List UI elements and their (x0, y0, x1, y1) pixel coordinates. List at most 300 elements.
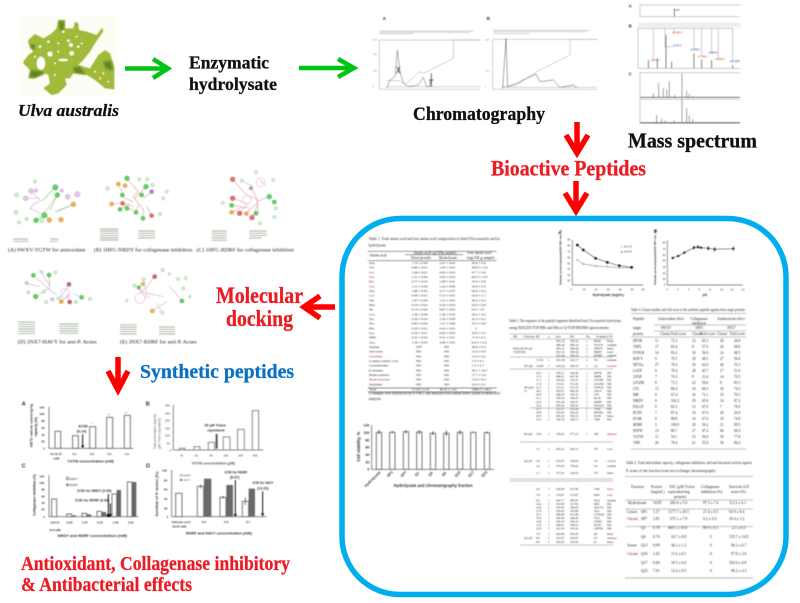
chart B: total antioxidant capacity: 20 (195, 454, 198, 458)
heading: Synthetic peptides: Synthetic peptides (140, 361, 294, 383)
table: peptide fragments: ALL (594, 509, 600, 513)
table: peptide fragments: 335.03 (556, 509, 565, 513)
table: fraction activities: P. acnes of the fraction from ion exchange chromatography (626, 469, 716, 473)
table: peptide fragments: DFTR (594, 371, 602, 375)
table: amino acid composition: ND (416, 350, 422, 354)
table: peptide fragments: RL (594, 532, 598, 536)
chart: soluble protein vs hydrolysate: Hydrolysate (mg/mL) (593, 293, 624, 297)
table: peptide fragments: oxidant (607, 358, 617, 362)
table: docking scores: TGTW (633, 435, 644, 439)
chart C: collagenase inhibition: 0.27 (82, 520, 88, 524)
chart D: P. acnes survival: 60 (164, 488, 168, 492)
table: peptide fragments: 219.05 (556, 459, 565, 463)
table: peptide fragments: 1 (548, 414, 550, 418)
table: fraction activities: acnes (%) (731, 490, 747, 494)
table: amino acid composition: Ile. (369, 308, 374, 312)
table: fraction activities: Collagenase (701, 485, 720, 489)
table: amino acid composition: ND (444, 368, 450, 372)
table: peptide fragments: toxic (607, 493, 614, 497)
table: peptide fragments: 340.26 (556, 516, 565, 520)
table: peptide fragments: 330.18 (556, 418, 565, 422)
table: docking scores: 7 (655, 411, 657, 415)
table: docking scores: 74.3 (671, 375, 677, 379)
table: peptide fragments: 1 (548, 512, 550, 516)
table: amino acid composition: Asp. (369, 261, 376, 265)
icon: Ulva australis seaweed (18, 17, 118, 97)
chart B: total antioxidant capacity: Total antioxidant capacity (153, 414, 157, 449)
table: peptide fragments: 265.99 (570, 532, 579, 536)
table: docking scores: 8 (692, 375, 694, 379)
table: peptide fragments: 245.16 (556, 364, 565, 368)
table: peptide fragments: 1 (586, 371, 588, 375)
table: amino acid composition: His. (369, 326, 375, 330)
table: peptide fragments: 340.26 (570, 516, 579, 520)
table: fraction activities: (mg/mL) (651, 490, 665, 494)
table: docking scores: 14 (692, 417, 696, 421)
chart: mass spectra: b7 768.4 (698, 56, 708, 58)
table: amino acid composition: 3.03 ± 0.04 (439, 275, 455, 279)
table: docking scores: 27 (692, 429, 696, 433)
chart C: collagenase inhibition: 100 (39, 481, 45, 485)
table: docking scores: 26.8 (734, 339, 740, 343)
chart: mass spectra: y10 1093 (730, 61, 740, 63)
table: docking scores: 10 (720, 393, 724, 397)
table: peptide fragments: 8.2 (536, 498, 540, 502)
table: peptide fragments: 17.1 (536, 378, 542, 382)
table: docking scores: 70.5 (734, 375, 740, 379)
table: peptide fragments: 352.24 (570, 526, 579, 530)
table: peptide fragments: toxic (607, 350, 614, 354)
table: amino acid composition: 1) Samples were hydrolyzed by 6 N HCl, and analyzed with sodium buffer system in amino acid (369, 392, 500, 397)
chart: soluble protein vs hydrolysate: 10 (583, 288, 586, 292)
heading: Mass spectrum: Mass spectrum (628, 128, 757, 152)
table: fraction activities: Cation (627, 510, 637, 514)
table: peptide fragments: HAV (594, 493, 601, 497)
table: peptide fragments: 287.87 (570, 498, 579, 502)
table: docking scores: 11 (655, 339, 659, 343)
table: peptide fragments: 285.77 (556, 498, 565, 502)
table: peptide fragments: Table 3. The sequence of the peptide fragments identified from Ulva australis hydrolysate (509, 319, 621, 323)
table: peptide fragments: RT (536, 334, 540, 338)
heading: Enzymatic hydrolysate: Enzymatic (189, 52, 269, 72)
table: docking scores: 48.5 (702, 357, 708, 361)
table: amino acid composition: 13.4 ± 0.2 (472, 354, 486, 358)
table: docking scores: 103.3 (671, 399, 679, 403)
table: amino acid composition: 3.17 ± 0.07 (439, 289, 455, 293)
chart B: total antioxidant capacity: equivalent (207, 428, 225, 432)
table: peptide fragments: 590.31 (570, 339, 579, 343)
table: peptide fragments: 1 (548, 523, 550, 527)
table: docking scores: 13 (655, 387, 659, 391)
table: amino acid composition: 40.6 ± 0.3 (472, 345, 486, 349)
table: docking scores: 16 (720, 387, 724, 391)
table: amino acid composition: 58.2 ± 4.2 (472, 312, 486, 316)
chart: mass spectra: B (629, 23, 632, 28)
table: docking scores: Table 4. Cluster number and fold score of the synthetic peptides against three target proteins (631, 308, 745, 312)
charts: synthetic peptide assays (22, 402, 274, 538)
chart A: ABTS scavenging: 0 (43, 446, 45, 450)
table: peptide fragments: 17.8 (536, 509, 542, 513)
table: peptide fragments: 1 (548, 487, 550, 491)
table: fraction activities: 54.85 (653, 501, 662, 505)
table: fraction activities: 0 (710, 535, 712, 539)
table: peptide fragments: AR (594, 432, 598, 436)
table: amino acid composition: 32.6 ± 0.2 (472, 331, 486, 335)
docking diagram B (94, 176, 193, 254)
chart B: total antioxidant capacity: B (146, 402, 150, 408)
table: docking scores: 70.4 (671, 363, 677, 367)
table: docking scores: 30 (720, 441, 724, 445)
table: amino acid composition: α-amino butyric acid (369, 359, 398, 363)
docking diagram D (18, 270, 97, 345)
table: docking scores: 14 (720, 399, 724, 403)
table: fraction activities: 90.2 ± 6.7 (731, 544, 746, 548)
table: peptide fragments: 582.33 (570, 403, 579, 407)
table: docking scores: Collagenase (690, 317, 708, 321)
table: docking scores: 20 (655, 441, 659, 445)
table: fraction activities: Gheant (627, 517, 639, 521)
chart: soluble protein vs hydrolysate: 10 (720, 288, 723, 292)
chart: cell viability: Hydrolysate (364, 470, 382, 488)
table: docking scores: Fold score (700, 332, 715, 336)
table: fraction activities: 90.2 ± 4.3 (731, 569, 746, 573)
table: peptide fragments: 26.2 (536, 389, 542, 393)
table: amino acid composition: Hydroxylysine (369, 378, 390, 382)
table: peptide fragments: IL (594, 540, 597, 544)
table: amino acid composition: 1.80 ± 0.05 (412, 289, 428, 293)
docking diagram C (197, 171, 295, 254)
table: docking scores: 16 (692, 351, 696, 355)
table: fraction activities: Gheant (627, 552, 639, 556)
table: peptide fragments: LF (594, 464, 598, 468)
table: peptide fragments: 1 (548, 385, 550, 389)
table: peptide fragments: 251.97 (556, 536, 565, 540)
table: peptide fragments: 2 (586, 346, 588, 350)
table: peptide fragments: 1 (586, 410, 588, 414)
table: peptide fragments: 1 (548, 536, 550, 540)
table: docking scores: 9 (655, 357, 657, 361)
table: peptide fragments: LYL (594, 393, 600, 397)
table: docking scores: Fold score (671, 332, 686, 336)
table: peptide fragments: 15 (524, 389, 528, 393)
table: peptide fragments: MALDI (513, 346, 523, 350)
table: docking scores: 16 (692, 393, 696, 397)
table: amino acid composition: ND (444, 350, 450, 354)
table: amino acid composition: 49.8 ± 0.8 (472, 261, 486, 265)
table: docking scores: 3 (655, 423, 657, 427)
table: docking scores (631, 308, 746, 449)
chart C: collagenase inhibition: IC50 for NRDY (0.95) (77, 489, 111, 493)
chart B: total antioxidant capacity: 50 μM Trolox (205, 424, 226, 428)
table: fraction activities: 400.1 ± 10.8 (668, 526, 687, 530)
table: docking scores: 67.9 (702, 405, 708, 409)
table: docking scores: 56.6 (702, 351, 708, 355)
chart: soluble protein vs hydrolysate: 90 (567, 238, 571, 242)
table: docking scores: 70.4 (671, 369, 677, 373)
chart C: collagenase inhibition: 0.53 (97, 520, 103, 524)
chart A: ABTS scavenging: 40 (41, 433, 45, 437)
table: amino acid composition: 9.0 ± 1.6 (472, 308, 484, 312)
table: peptide fragments: 1 (548, 375, 550, 379)
table: peptide fragments: oxidant (607, 459, 616, 463)
table: peptide fragments: Q2-Q3 (524, 536, 533, 540)
table: amino acid composition: 7.3 ± 2.7 (472, 364, 484, 368)
table: peptide fragments: 21.7 (536, 407, 542, 411)
table: docking scores: Fold score (730, 332, 745, 336)
table: docking scores: DFTR (633, 339, 643, 343)
table: peptide fragments: TGIC (594, 407, 601, 411)
table: peptide fragments: 1 (548, 516, 550, 520)
table: fraction activities: 0 (710, 569, 712, 573)
table: amino acid composition: (mg/100 g sample) (467, 256, 495, 260)
table: peptide fragments: ND (607, 418, 612, 422)
chart C: collagenase inhibition: 0.09 (67, 520, 73, 524)
table: docking scores: 12 (692, 339, 696, 343)
chart: soluble protein vs hydrolysate: 14 (742, 288, 745, 292)
table: peptide fragments: 15.6 (536, 516, 542, 520)
table: docking scores: 9 (655, 369, 657, 373)
table: peptide fragments: 278.02 (570, 464, 579, 468)
table: peptide fragments: 22.1 (536, 396, 542, 400)
chart C: collagenase inhibition: 1.06 (113, 520, 119, 524)
table: peptide fragments: 514.16 (570, 407, 579, 411)
table: peptide fragments: PLQ (594, 498, 601, 502)
table: peptide fragments: 1 (586, 378, 588, 382)
table: peptide fragments: 274.97 (556, 493, 565, 497)
chart: chromatography traces: B (487, 16, 491, 21)
table: docking scores: 87.4 (671, 411, 677, 415)
chart: mass spectra: y6 678.3 (691, 50, 700, 52)
table: docking scores: 70.5 (671, 357, 677, 361)
chart: soluble protein vs hydrolysate: 40 (567, 267, 571, 271)
table: docking scores: 21 (720, 423, 724, 427)
table: amino acid composition: 2386.5 ± 49.2 (472, 387, 491, 391)
table: peptide fragments: 1 (548, 400, 550, 404)
table: docking scores: 56.8 (734, 357, 740, 361)
table: peptide fragments: 14.4 (536, 502, 542, 506)
table: amino acid composition: 17.9 ± 0.1 (472, 336, 486, 340)
chart D: P. acnes survival: 80 (164, 478, 168, 482)
table: amino acid composition: 0.31 ± 0.02 (412, 336, 428, 340)
table: peptide fragments: 394.23 (570, 414, 579, 418)
table: docking scores: NRDY (633, 399, 644, 403)
table: peptide fragments: 1 (548, 403, 550, 407)
table: docking scores: 56.0 (702, 435, 708, 439)
heading: Chromatography: Chromatography (413, 104, 545, 125)
table: fraction activities: Q17 (641, 561, 648, 565)
table: peptide fragments: VRP (594, 418, 600, 422)
table: amino acid composition: Free amino acid² (467, 251, 493, 255)
table: docking scores: 67.0 (702, 417, 708, 421)
chart D: P. acnes survival: (8.57) (230, 475, 240, 479)
table: docking scores: 83.4 (671, 351, 677, 355)
table: peptide fragments: Fn (609, 334, 613, 338)
table: peptide fragments: 273.11 (556, 385, 565, 389)
heading: Molecular docking (216, 283, 303, 331)
chart: cell viability: SP1 (386, 470, 394, 478)
table: docking scores: 44 (720, 363, 724, 367)
chart: cell viability: 0 (367, 468, 369, 472)
table: peptide fragments: 503.30 (556, 410, 565, 414)
table: docking scores: 18 (720, 417, 724, 421)
table: peptide fragments: 250.97 (570, 536, 579, 540)
table: peptide fragments: 14.8 (536, 520, 542, 524)
table: amino acid composition: Amino acid (369, 254, 387, 258)
table: peptide fragments: 1 (548, 498, 550, 502)
table: peptide fragments: SP-Q4- (524, 432, 533, 436)
table: docking scores: FALLP (633, 405, 644, 409)
table: docking scores: 27 (720, 357, 724, 361)
table: docking scores: target (633, 326, 641, 330)
table: amino acid composition: ND (416, 373, 422, 377)
table: docking scores: Cluster (717, 332, 728, 336)
table: amino acid composition: 847.3 ± 4.0 (472, 275, 488, 279)
chart A: ABTS scavenging (22, 402, 133, 463)
table: docking scores: Antibacterial effect (717, 317, 745, 321)
chart B: total antioxidant capacity: 500 (253, 454, 258, 458)
table: fraction activities: 24.7 ± 8.0 (671, 535, 686, 539)
table: docking scores: 29 (720, 339, 724, 343)
table: peptide fragments: 1 (548, 520, 550, 524)
table: fraction activities: 36.2 ± 1.2 (671, 544, 686, 548)
chart D: P. acnes survival: (8.05 mM) (173, 524, 186, 528)
table: fraction activities: Protein (651, 485, 662, 489)
table: peptide fragments: 1 (548, 389, 550, 393)
table: amino acid composition: 0.50 ± 0.03 (412, 317, 428, 321)
table: peptide fragments: 1 (586, 393, 588, 397)
chart A: ABTS scavenging: 60 (41, 426, 45, 430)
table: peptide fragments: 580.01 (556, 523, 565, 527)
table: amino acid composition: Ornithine (369, 382, 383, 386)
chart: soluble protein vs hydrolysate: 80 (663, 240, 666, 244)
table: docking scores: 27 (655, 363, 659, 367)
table: fraction activities: 1.57 (653, 510, 660, 514)
table: peptide fragments: 23.2 (536, 371, 542, 375)
chart: soluble protein vs hydrolysate: B (654, 229, 657, 234)
chart: soluble protein vs hydrolysate: A (558, 230, 562, 235)
chart A: ABTS scavenging: ** (107, 413, 110, 417)
table: peptide fragments: oxidant (607, 343, 617, 347)
table: peptide fragments: 591.31 (556, 350, 565, 354)
table: peptide fragments: NHTY (594, 346, 604, 350)
chart: chromatography traces: 0 (485, 86, 487, 88)
heading: Antioxidant, Collagenase inhibitory & Antibacterial effects (21, 553, 290, 596)
table: docking scores: 30.9 (734, 411, 740, 415)
table: peptide fragments: 380.20 (570, 346, 579, 350)
table: peptide fragments: RLSL (594, 396, 602, 400)
table: peptide fragments: bitter (607, 471, 613, 475)
table: peptide fragments: 23.8 (536, 432, 542, 436)
chart D: P. acnes survival: 20 (164, 506, 168, 510)
table: amino acid composition: Ala. (369, 289, 375, 293)
table: amino acid composition: ND (416, 364, 422, 368)
table: docking scores: 47.4 (702, 429, 708, 433)
chart B: total antioxidant capacity: 50 (209, 454, 213, 458)
table: peptide fragments: 1 (548, 382, 550, 386)
table: docking scores: 29 (692, 363, 696, 367)
table: docking scores: 71.1 (702, 393, 708, 397)
table: peptide fragments: 500.25 (570, 400, 579, 404)
table: fraction activities: TAC (μM Trolox (669, 485, 695, 489)
table: peptide fragments: ND (607, 512, 612, 516)
table: peptide fragments: 1 (586, 403, 588, 407)
chart: cell viability: 80 (365, 438, 369, 442)
table: fraction activities: Q16 (641, 552, 648, 556)
table: peptide fragments: 345.21 (556, 371, 565, 375)
table: peptide fragments: using MALDI-TOF/MS and Micro Q-TOF/MS/MS spectrometer (509, 326, 610, 330)
table: peptide fragments: 18.3 (536, 414, 542, 418)
table: docking scores: 23 (692, 381, 696, 385)
table: peptide fragments: ND (607, 400, 612, 404)
table: fraction activities: Q23 (641, 569, 648, 573)
table: docking scores: 9 (655, 417, 657, 421)
chart C: collagenase inhibition: 0 (43, 515, 45, 519)
chart C: collagenase inhibition: RDRF (70, 483, 78, 487)
chart: chromatography traces: 2500 (373, 40, 378, 42)
chart D: P. acnes survival: RDRF (183, 473, 191, 477)
table: peptide fragments: ND (607, 526, 612, 530)
table: amino acid composition: ND (444, 373, 450, 377)
table: docking scores: 55.3 (734, 363, 740, 367)
table: amino acid composition: 17.26 ± 0.52 (412, 387, 430, 391)
table: docking scores: 21 (692, 441, 696, 445)
table: amino acid composition: 17.7 ± 3.4 (472, 373, 486, 377)
table: peptide fragments (509, 319, 621, 545)
table: fraction activities: 97.8 ± 2.6 (731, 552, 746, 556)
chart: soluble protein vs hydrolysate: 60 (567, 255, 571, 259)
table: amino acid composition: 7.0 ± 0.1 (472, 359, 484, 363)
chart: cell viability: Cell viability, % (356, 431, 361, 462)
table: peptide fragments: 1 (586, 350, 588, 354)
table: docking scores: 60.3 (702, 387, 708, 391)
table: amino acid composition: 0.87 ± 0.03 (439, 308, 455, 312)
table: peptide fragments: 329.23 (570, 396, 579, 400)
table: docking scores: Cluster (660, 332, 671, 336)
chart A: ABTS scavenging: ** (125, 411, 128, 415)
table: peptide fragments: 317.03 (556, 471, 565, 475)
table: peptide fragments: 1 (548, 432, 550, 436)
table: docking scores: 80.7 (671, 429, 677, 433)
table: peptide fragments: 383.27 (556, 389, 565, 393)
table: peptide fragments: 4.0 (536, 487, 540, 491)
table: fraction activities: 18.4 ± 1.2 (729, 517, 744, 521)
table: peptide fragments: oxidant (607, 364, 617, 368)
chart: cell viability: Q16 (454, 470, 462, 478)
table: amino acid composition: 1.24 ± 0.08 (439, 284, 455, 288)
chart A: ABTS scavenging: 20 (41, 440, 45, 444)
table: amino acid composition: 285.0 ± 3.0 (472, 266, 488, 270)
arrow: hydrolysate to chromatography (299, 59, 354, 77)
table: peptide fragments: 15.3 (536, 418, 542, 422)
table: peptide fragments: Q2-Q3 (524, 459, 533, 463)
table: fraction activities: 0.60 (653, 561, 660, 565)
chart D: P. acnes survival: 100 (162, 469, 167, 473)
table: fraction activities: Anion (627, 544, 637, 548)
table: docking scores: 29 (692, 423, 696, 427)
table: peptide fragments: bitter (607, 487, 613, 491)
table: peptide fragments: 1 (548, 493, 550, 497)
chart: mass spectra (629, 3, 741, 123)
arrow: seaweed to hydrolysate (125, 59, 168, 78)
table: docking scores: 21.6 (702, 375, 708, 379)
table: fraction activities: 4.2 ± 0.4 (703, 517, 717, 521)
table: amino acid composition: 0.77 ± 0.03 (412, 280, 428, 284)
chart: cell viability: Q5 (441, 471, 447, 477)
docking diagram E (120, 268, 197, 345)
label: Ulva australis: Ulva australis (18, 101, 119, 120)
table: docking scores: Cluster (692, 332, 703, 336)
table: peptide fragments: 1 (548, 410, 550, 414)
